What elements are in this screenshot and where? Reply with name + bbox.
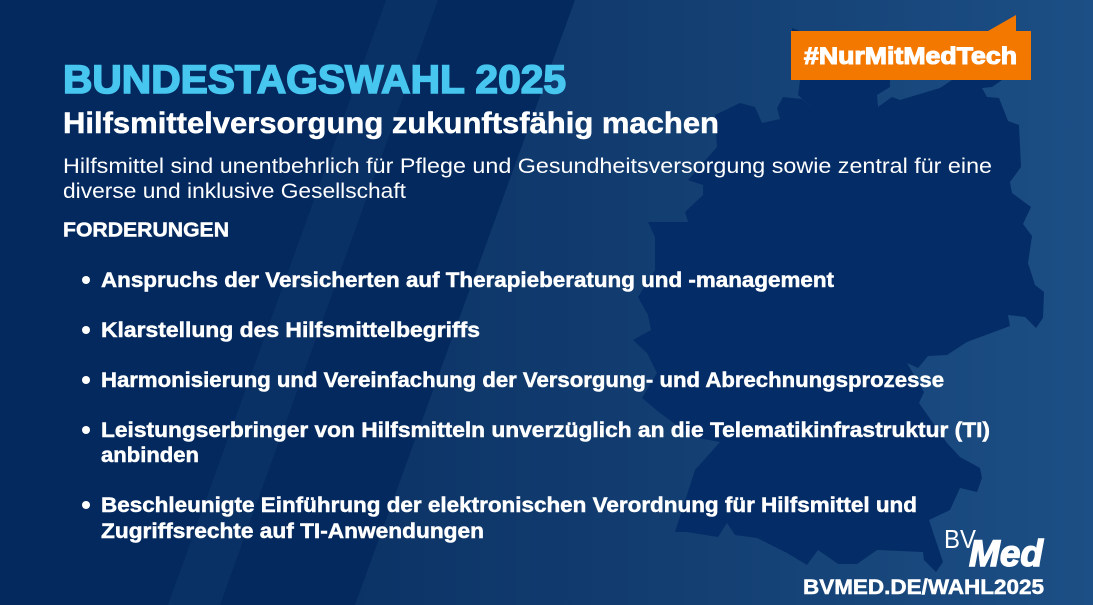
demand 3: Harmonisierung und Vereinfachung der Versorgung- und Abrechnungsprozesse: [101, 369, 944, 392]
title: BUNDESTAGSWAHL 2025: [63, 58, 566, 102]
demand 1: Anspruchs der Versicherten auf Therapieberatung und -management: [101, 269, 834, 292]
demand 5: [82, 494, 917, 543]
intro text: [63, 154, 992, 203]
demand 5: Beschleunigte Einführung der elektronischen Verordnung für Hilfsmittel und: [101, 494, 917, 517]
website URL: BVMED.DE/WAHL2025: [803, 576, 1044, 599]
heading: Forderungen: FORDERUNGEN: [63, 218, 229, 242]
list of demands: [82, 269, 990, 543]
demand 2: Klarstellung des Hilfsmittelbegriffs: [101, 319, 480, 342]
hashtag badge: #NurMitMedTech: [804, 43, 1017, 70]
map of Germany silhouette: [633, 28, 1044, 572]
intro text: Hilfsmittel sind unentbehrlich für Pflege und Gesundheitsversorgung sowie zentral für eine: [63, 154, 992, 178]
BVMed logo: BV: [944, 524, 977, 554]
demand 4: anbinden: [101, 444, 199, 467]
hashtag badge: [791, 15, 1031, 80]
BVMed logo: [944, 524, 1044, 574]
demand 5: Zugriffsrechte auf TI-Anwendungen: [101, 520, 484, 543]
BVMed logo: Med: [969, 533, 1044, 574]
subtitle: Hilfsmittelversorgung zukunftsfähig machen: [63, 107, 719, 140]
intro text: diverse und inklusive Gesellschaft: [63, 179, 406, 203]
demand 4: Leistungserbringer von Hilfsmitteln unverzüglich an die Telematikinfrastruktur (TI): [101, 419, 990, 442]
demand 4: [82, 419, 990, 467]
